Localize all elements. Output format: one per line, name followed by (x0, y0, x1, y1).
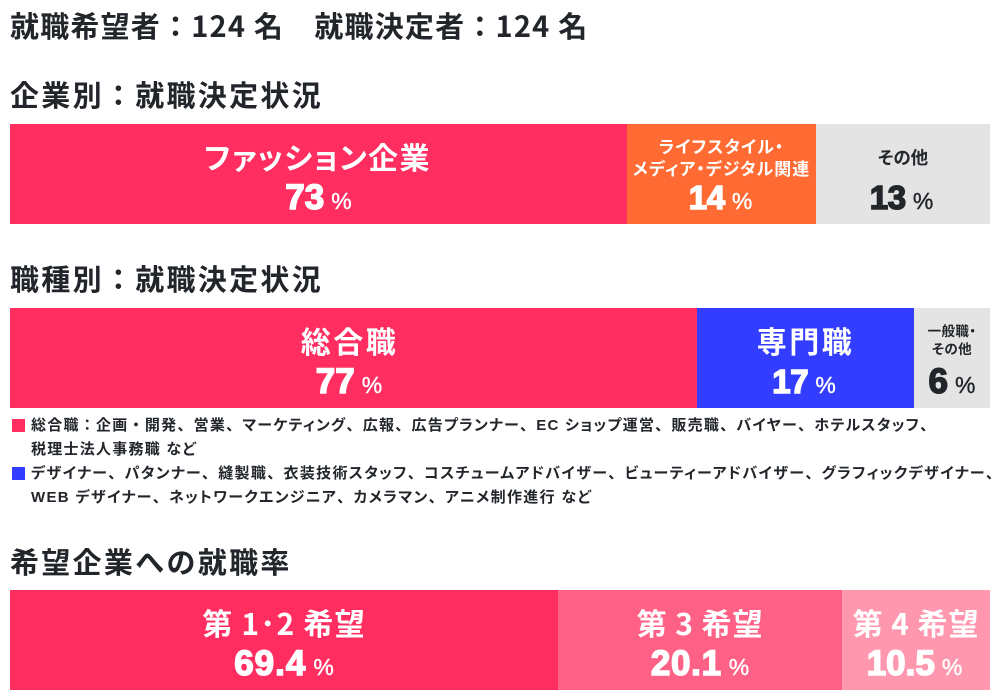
segment: third choice 20.1%: 第 3 希望 (637, 600, 763, 644)
segment: specialist 17%: 専門職 (757, 318, 854, 362)
segment: general career track 77%: 総合職 (301, 318, 398, 362)
legend text: general career roles: 総合職：企画・開発、営業、マーケティング、広報、広告プランナー、EC ショップ運営、販売職、バイヤー、ホテルスタッフ、 (31, 417, 936, 434)
legend: general career track (12, 417, 936, 458)
segment: general career track 77%: 77 % (316, 362, 382, 401)
segment: first and second choice 69.4%: 第 1･2 希望 (202, 600, 366, 644)
segment: general clerical and other 6%: 一般職・ (928, 320, 976, 340)
stacked bar: company type (10, 124, 990, 224)
legend text: specialist roles: WEB デザイナー、ネットワークエンジニア、カメラマン、アニメ制作進行 など (31, 489, 592, 506)
segment: other 13%: その他 (878, 145, 928, 170)
segment: third choice 20.1%: 20.1 % (651, 644, 749, 683)
segment: fourth choice 10.5%: 10.5 % (867, 644, 962, 683)
segment: other 13% (816, 124, 990, 224)
segment: general clerical and other 6%: その他 (932, 338, 972, 358)
stacked bar: job type (10, 308, 990, 408)
segment: fourth choice 10.5% (842, 590, 990, 690)
segment: lifestyle, media, digital 14% (627, 124, 816, 224)
segment: general clerical and other 6% (914, 308, 990, 408)
legend: specialist (12, 464, 1000, 506)
legend text: specialist roles: デザイナー、パタンナー、縫製職、衣装技術スタッフ、コスチュームアドバイザー、ビューティーアドバイザー、グラフィックデザイナー、 (31, 465, 1000, 482)
segment: first and second choice 69.4% (10, 590, 558, 690)
segment: first and second choice 69.4%: 69.4 % (234, 644, 334, 683)
segment: fashion companies 73%: ファッション企業 (204, 134, 431, 178)
heading: placement by job type: 職種別：就職決定状況 (10, 257, 323, 299)
segment: specialist 17% (697, 308, 914, 408)
segment: general career track 77% (10, 308, 697, 408)
legend text: specialist roles (31, 464, 1000, 506)
segment: third choice 20.1% (558, 590, 842, 690)
segment: fashion companies 73% (10, 124, 627, 224)
heading: placement by company type: 企業別：就職決定状況 (10, 73, 323, 115)
stacked bar: preference rank (10, 590, 990, 690)
legend swatch: pink (12, 419, 25, 432)
segment: fashion companies 73%: 73 % (285, 178, 352, 217)
segment: specialist 17%: 17 % (772, 363, 836, 400)
legend text: general career roles (31, 417, 936, 458)
segment: other 13%: 13 % (870, 179, 933, 216)
segment: lifestyle, media, digital 14%: 14 % (689, 179, 752, 216)
segment: lifestyle, media, digital 14%: メディア・デジタル関連 (633, 155, 810, 180)
segment: lifestyle, media, digital 14%: ライフスタイル・ (659, 133, 784, 158)
legend swatch: blue (12, 467, 25, 480)
heading: job seekers and placements: 就職希望者：124 名 就職決定者：124 名 (10, 4, 588, 46)
legend text: general career roles: 税理士法人事務職 など (31, 441, 197, 458)
segment: fourth choice 10.5%: 第 4 希望 (853, 600, 979, 644)
segment: general clerical and other 6%: 6 % (929, 362, 975, 401)
heading: placement rate at preferred companies: 希望企業への就職率 (10, 540, 292, 582)
